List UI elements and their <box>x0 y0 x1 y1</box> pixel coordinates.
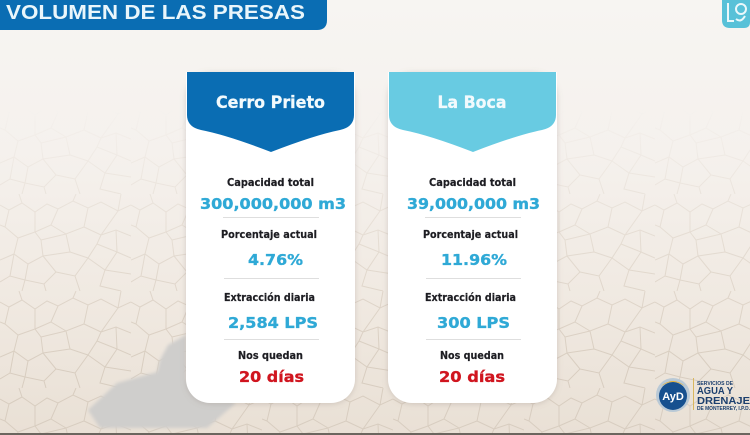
logo: Agua y Drenaje de Monterrey: DRENAJE <box>697 396 750 407</box>
stat: nos quedan: Nos quedan <box>238 350 303 362</box>
panel: La Boca <box>388 72 557 403</box>
shadow of person on cracked ground <box>88 335 236 428</box>
header: Cerro Prieto <box>187 72 354 152</box>
stat: extraccion diaria: Extracción diaria <box>425 292 516 304</box>
logo: Agua y Drenaje de Monterrey: SERVICIOS DE <box>697 381 734 387</box>
bottom dark strip <box>0 433 750 435</box>
stat: nos quedan: Nos quedan <box>440 350 504 362</box>
stat: capacidad total: Capacidad total <box>429 177 516 189</box>
stat: extraccion diaria: 2,584 LPS <box>228 314 318 332</box>
stat: capacidad total <box>200 177 346 213</box>
stat: capacidad total: 300,000,000 m3 <box>200 195 346 213</box>
header: La Boca <box>389 72 556 152</box>
stat: capacidad total: 39,000,000 m3 <box>407 195 540 213</box>
header: Cerro Prieto: Cerro Prieto <box>216 93 325 112</box>
title banner <box>0 0 327 30</box>
stat: porcentaje actual: Porcentaje actual <box>423 229 518 241</box>
stat: extraccion diaria: Extracción diaria <box>224 292 315 304</box>
panel: Cerro Prieto <box>186 72 355 403</box>
stat: porcentaje actual <box>221 229 317 269</box>
logo: Agua y Drenaje de Monterrey: DE MONTERREY, I.P.D. <box>697 406 750 412</box>
header: La Boca: La Boca <box>438 93 506 112</box>
stat: porcentaje actual: Porcentaje actual <box>221 229 317 241</box>
stat: porcentaje actual: 4.76% <box>248 251 303 269</box>
stat: porcentaje actual: 11.96% <box>441 251 507 269</box>
stat: porcentaje actual <box>423 229 518 269</box>
icon: logo seal: AyD <box>662 391 684 403</box>
stat: nos quedan <box>439 350 505 386</box>
title text: VOLUMEN DE LAS PRESAS <box>6 1 305 24</box>
logo: Agua y Drenaje de Monterrey: AGUA Y <box>697 386 733 397</box>
stat: nos quedan: 20 días <box>439 368 505 386</box>
stat: extraccion diaria <box>224 292 318 332</box>
stat: capacidad total <box>407 177 540 213</box>
background: cracked dry earth <box>0 156 750 433</box>
stat: extraccion diaria <box>425 292 516 332</box>
stat: capacidad total: Capacidad total <box>227 177 314 189</box>
logo: Agua y Drenaje de Monterrey <box>656 378 750 412</box>
icon: top right corner logo <box>722 0 750 28</box>
stat: nos quedan: 20 días <box>239 368 304 386</box>
stat: nos quedan <box>238 350 304 386</box>
stat: extraccion diaria: 300 LPS <box>437 314 510 332</box>
